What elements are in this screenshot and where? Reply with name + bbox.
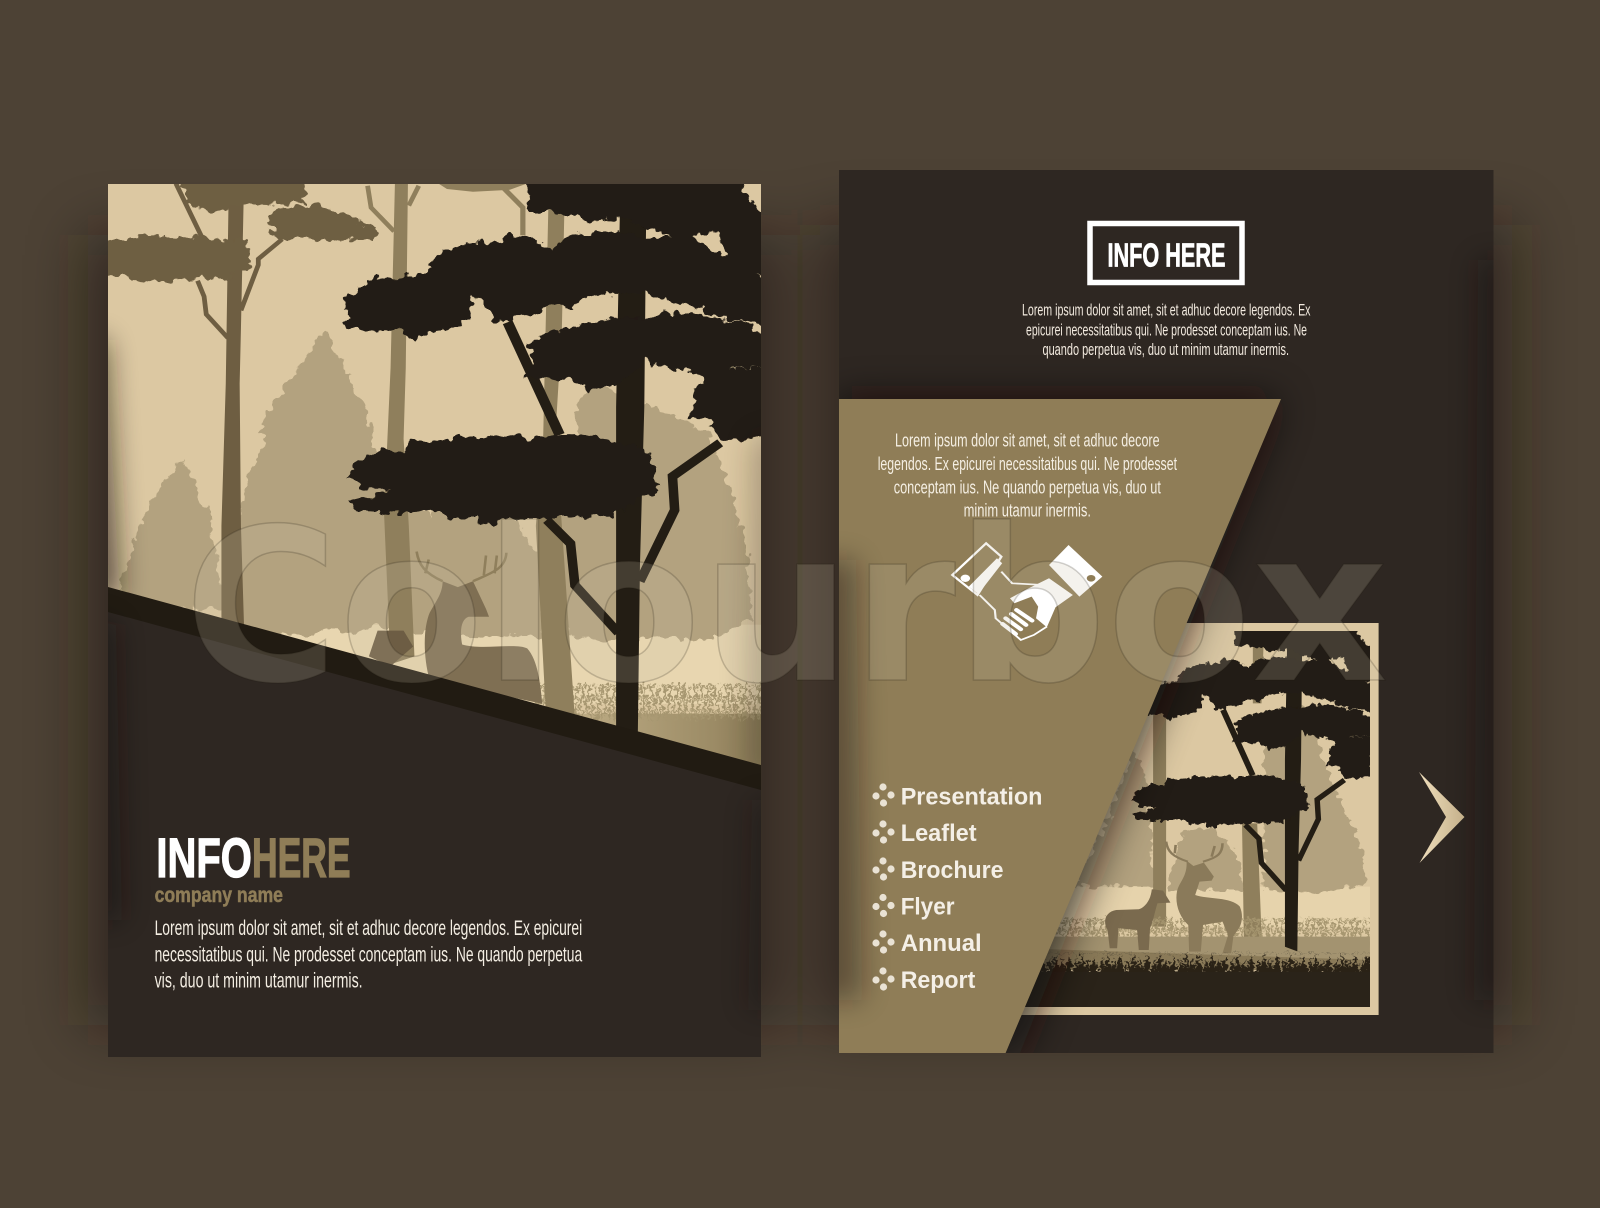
dark tree xyxy=(343,178,768,737)
forest scene xyxy=(108,184,761,765)
item: brochure: Brochure xyxy=(901,857,1004,884)
item: annual: Annual xyxy=(901,930,982,957)
gold panel paragraph: legendos. Ex epicurei necessitatibus qui. Ne prodesset xyxy=(878,453,1177,474)
panel: right brochure page xyxy=(839,170,1494,1053)
deer xyxy=(369,552,542,704)
item: flyer: Flyer xyxy=(901,894,954,920)
item: leaflet: Leaflet xyxy=(901,820,977,847)
item: flyer xyxy=(872,894,954,920)
intro paragraph xyxy=(1022,302,1311,359)
heading: here: HERE xyxy=(252,826,351,889)
dark diagonal band xyxy=(108,587,761,791)
panel edge shading xyxy=(70,615,800,1010)
deer pair xyxy=(1105,842,1242,953)
gold diagonal panel xyxy=(839,399,1281,1053)
gold panel paragraph xyxy=(878,430,1177,521)
info here box xyxy=(1090,224,1242,282)
gold panel paragraph: Lorem ipsum dolor sit amet, sit et adhuc decore xyxy=(895,430,1160,451)
body text: vis, duo ut minim utamur inermis. xyxy=(155,970,363,992)
panel: left brochure page xyxy=(108,184,761,1057)
info here box: INFO HERE xyxy=(1108,237,1226,274)
intro paragraph: Lorem ipsum dolor sit amet, sit et adhuc decore legendos. Ex xyxy=(1022,302,1311,320)
company name: company name xyxy=(155,884,283,907)
icon: handshake xyxy=(952,543,1102,640)
panel edge shading xyxy=(1482,280,1494,983)
watermark: Colourbox xyxy=(184,483,1388,730)
list: document types xyxy=(872,783,1042,994)
arrow: next chevron xyxy=(1419,772,1464,863)
heading: info: INFO xyxy=(156,826,252,889)
body text: Lorem ipsum dolor sit amet, sit et adhuc decore legendos. Ex epicurei xyxy=(155,917,582,940)
panel shadows xyxy=(88,225,1512,1025)
small forest drawing xyxy=(1021,626,1372,1008)
item: report: Report xyxy=(901,967,975,994)
intro paragraph: quando perpetua vis, duo ut minim utamur inermis. xyxy=(1042,341,1289,359)
gold panel paragraph: conceptam ius. Ne quando perpetua vis, duo ut xyxy=(894,476,1161,497)
scene edge shading xyxy=(80,340,790,780)
framed forest picture xyxy=(1000,623,1379,1015)
gold panel shadow xyxy=(839,399,1280,1053)
gold panel paragraph: minim utamur inermis. xyxy=(964,500,1091,521)
gold panel edge shading xyxy=(839,546,876,1014)
body text xyxy=(155,917,582,992)
body text: necessitatibus qui. Ne prodesset conceptam ius. Ne quando perpetua xyxy=(155,944,582,966)
forest drawing xyxy=(100,178,768,805)
dark lower panel xyxy=(108,612,761,1057)
item: presentation: Presentation xyxy=(901,783,1042,810)
intro paragraph: epicurei necessitatibus qui. Ne prodesset conceptam ius. Ne xyxy=(1026,322,1307,340)
